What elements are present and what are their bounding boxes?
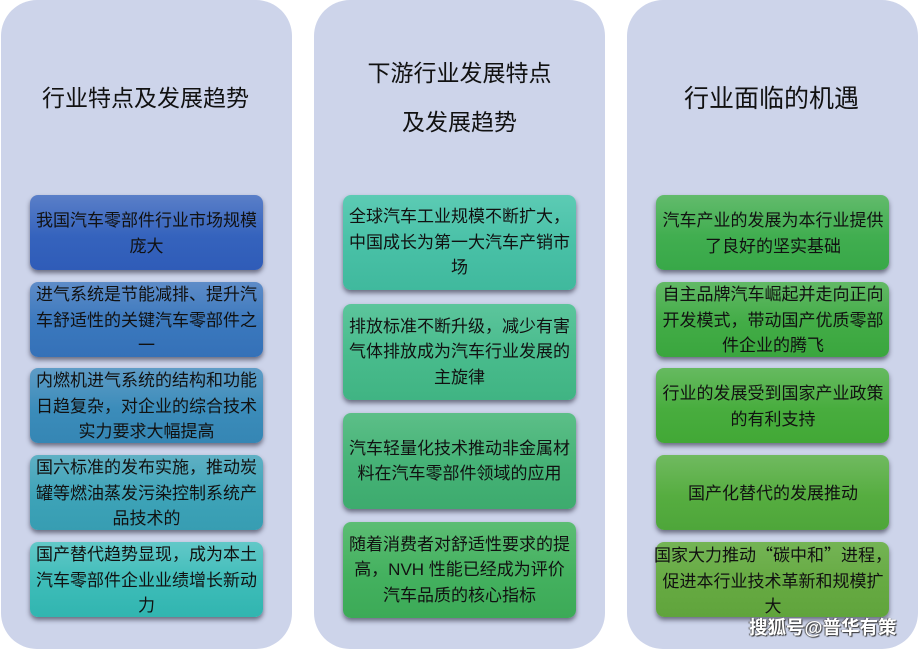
right item 5: 国家大力推动“碳中和”进程， <box>654 541 892 566</box>
middle item 3: 料在汽车零部件领域的应用 <box>358 464 562 483</box>
left item 3 <box>30 368 263 443</box>
middle item 3: 汽车轻量化技术推动非金属材 <box>349 438 570 458</box>
right item 3 <box>656 368 889 443</box>
left item 3: 内燃机进气系统的结构和功能 <box>36 371 257 390</box>
heading: downstream characteristics: 及发展趋势 <box>402 109 517 135</box>
left item 4: 国六标准的发布实施，推动炭 <box>36 458 257 477</box>
left item 2: 车舒适性的关键汽车零部件之 <box>36 311 257 330</box>
heading: industry characteristics: 行业特点及发展趋势 <box>42 85 249 111</box>
left item 1 <box>30 195 263 270</box>
left item 3: 日趋复杂，对企业的综合技术 <box>36 397 257 416</box>
right item 1 <box>656 195 889 270</box>
middle item 1: 全球汽车工业规模不断扩大， <box>349 207 570 226</box>
right item 3: 的有利支持 <box>730 410 816 428</box>
right item 5: 促进本行业技术革新和规模扩 <box>662 572 884 591</box>
right item 1: 汽车产业的发展为本行业提供 <box>662 211 884 230</box>
middle item 3 <box>343 413 576 509</box>
right item 1: 了良好的坚实基础 <box>705 236 841 256</box>
middle item 2: 气体排放成为汽车行业发展的 <box>349 342 570 361</box>
watermark: 搜狐号@普华有策 <box>749 617 897 638</box>
right item 5: 大 <box>764 597 782 616</box>
middle item 4: 高，NVH 性能已经成为评价 <box>354 560 565 579</box>
right item 2 <box>656 282 889 357</box>
middle item 4: 随着消费者对舒适性要求的提 <box>349 535 570 554</box>
right item 2: 自主品牌汽车崛起并走向正向 <box>662 285 884 304</box>
left item 2: 一 <box>138 336 155 355</box>
right item 5 <box>656 542 889 617</box>
left item 5 <box>30 542 263 617</box>
left item 5: 力 <box>138 596 155 615</box>
left item 2: 进气系统是节能减排、提升汽 <box>36 285 257 304</box>
middle item 1: 中国成长为第一大汽车产销市 <box>349 233 570 252</box>
middle item 2: 排放标准不断升级，减少有害 <box>349 317 570 336</box>
middle item 1: 场 <box>451 258 468 277</box>
heading: downstream characteristics <box>368 60 552 135</box>
right item 4: 国产化替代的发展推动 <box>688 484 858 503</box>
left item 3: 实力要求大幅提高 <box>78 422 214 441</box>
right item 3: 行业的发展受到国家产业政策 <box>662 384 884 403</box>
left item 1: 我国汽车零部件行业市场规模 <box>36 211 257 230</box>
heading: opportunities: 行业面临的机遇 <box>684 85 859 113</box>
left item 5: 国产替代趋势显现，成为本土 <box>36 545 257 564</box>
panel: downstream characteristics <box>314 0 605 649</box>
panel: opportunities <box>627 0 918 649</box>
left item 4 <box>30 455 263 530</box>
middle item 1 <box>343 195 576 290</box>
right item 2: 开发模式，带动国产优质零部 <box>662 311 884 330</box>
left item 2 <box>30 282 263 357</box>
middle item 2: 主旋律 <box>434 368 485 387</box>
left item 4: 品技术的 <box>112 509 180 528</box>
right item 4 <box>656 455 889 530</box>
middle item 2 <box>343 304 576 400</box>
right item 2: 件企业的腾飞 <box>722 336 824 355</box>
middle item 4 <box>343 522 576 618</box>
left item 5: 汽车零部件企业业绩增长新动 <box>36 571 257 590</box>
panel: industry characteristics <box>1 0 292 649</box>
middle item 4: 汽车品质的核心指标 <box>383 586 536 605</box>
left item 4: 罐等燃油蒸发污染控制系统产 <box>36 484 257 503</box>
heading: downstream characteristics: 下游行业发展特点 <box>368 60 552 86</box>
left item 1: 庞大 <box>130 236 164 256</box>
